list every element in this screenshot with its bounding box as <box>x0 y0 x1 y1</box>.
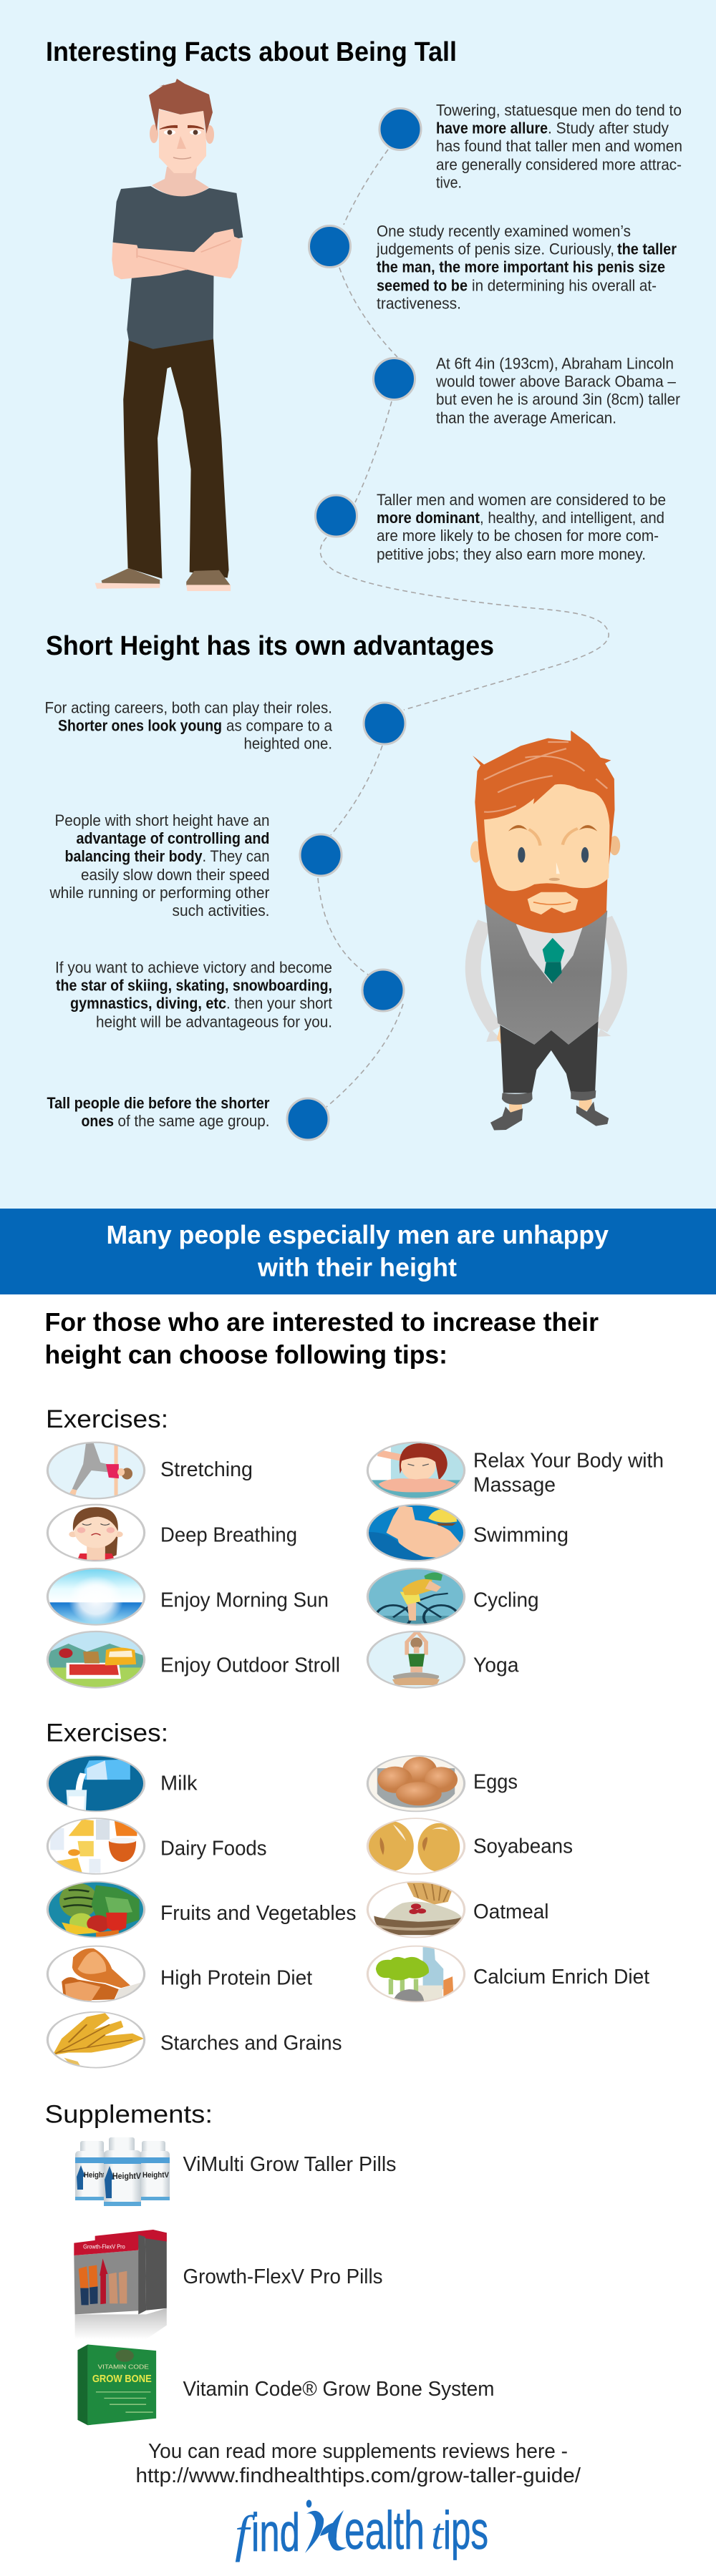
item: swimming <box>366 1504 569 1561</box>
icon: eggs <box>366 1755 466 1812</box>
label: High Protein Diet <box>160 1966 312 1989</box>
heading: tips <box>44 1307 599 1370</box>
illustration: short bearded man <box>470 731 620 1131</box>
fact 1: has found that taller men and women <box>436 137 682 155</box>
label: Massage <box>473 1474 556 1497</box>
icon: calcium enrich diet <box>366 1946 466 2003</box>
icon: dairy foods <box>46 1818 146 1875</box>
item: dairy foods <box>46 1818 267 1875</box>
fact 2: seemed to be <box>377 276 468 295</box>
item: soyabeans <box>366 1818 573 1875</box>
heading: exercises: Exercises: <box>46 1405 168 1433</box>
fact 2 <box>309 222 677 312</box>
heading: supplements: Supplements: <box>44 2101 213 2128</box>
item: starches and grains <box>46 2011 342 2069</box>
label: Milk <box>160 1772 198 1795</box>
heading: tips: For those who are interested to increase their <box>44 1307 599 1337</box>
advantage 2: balancing their body <box>64 847 203 865</box>
advantage 3 <box>55 959 404 1030</box>
advantage 4: Tall people die before the shorter <box>47 1094 270 1112</box>
advantage 3: If you want to achieve victory and become <box>55 959 332 976</box>
footer note: http://www.findhealthtips.com/grow-taller-guide/ <box>136 2464 581 2487</box>
fact 2: One study recently examined women’s <box>377 222 631 240</box>
advantage 3: height will be advantageous for you. <box>96 1013 332 1030</box>
fact 1: have more allure <box>436 119 548 137</box>
heading: tips: height can choose following tips: <box>44 1340 448 1370</box>
banner <box>0 1209 716 1294</box>
label: Stretching <box>160 1458 253 1481</box>
label: Starches and Grains <box>160 2032 342 2055</box>
label: Swimming <box>473 1524 569 1547</box>
icon: green box: GROW BONE <box>92 2372 152 2384</box>
icon: pill bottles: Height <box>84 2171 105 2180</box>
banner: with their height <box>257 1252 457 1282</box>
advantage 2: advantage of controlling and <box>76 829 269 847</box>
fact 1: tive. <box>436 173 462 192</box>
fact 1: . Study after study <box>548 119 669 137</box>
label: Eggs <box>473 1770 518 1793</box>
fact 2: the man, the more important his penis size <box>377 258 665 276</box>
label: ViMulti Grow Taller Pills <box>183 2153 397 2176</box>
heading: foods: Exercises: <box>46 1719 168 1747</box>
connector: dashed path through tall facts <box>318 150 609 1107</box>
logo: find health tips: f <box>235 2505 256 2562</box>
fact 2: in determining his overall at- <box>472 276 657 295</box>
label: Fruits and Vegetables <box>160 1902 357 1925</box>
label: Yoga <box>473 1654 519 1677</box>
label: Oatmeal <box>473 1901 548 1923</box>
fact 4: , healthy, and intelligent, and <box>480 509 664 527</box>
advantage 2 <box>49 811 342 919</box>
marker <box>315 495 357 537</box>
fact 4: more dominant <box>377 509 480 527</box>
advantage 1: as compare to a <box>226 717 332 734</box>
title: tall facts: Interesting Facts about Being Tall <box>46 37 457 67</box>
item: cycling <box>366 1568 538 1629</box>
label: Calcium Enrich Diet <box>473 1966 649 1989</box>
marker <box>300 834 342 876</box>
icon: oatmeal <box>366 1881 466 1938</box>
icon: pill bottles: HeightV <box>142 2171 170 2180</box>
advantage 4: ones <box>82 1112 114 1130</box>
logo: find health tips: ealth <box>344 2500 425 2560</box>
icon: morning sun <box>46 1568 146 1625</box>
advantage 2: easily slow down their speed <box>81 866 269 884</box>
logo: find health tips <box>235 2500 488 2562</box>
label: Cycling <box>473 1589 538 1611</box>
item: deep breathing <box>46 1504 297 1561</box>
label: Growth-FlexV Pro Pills <box>183 2265 382 2288</box>
label <box>473 1450 664 1497</box>
advantage 3: the star of skiing, skating, snowboarding, <box>56 976 332 995</box>
label: Enjoy Outdoor Stroll <box>160 1654 340 1677</box>
fact 3: but even he is around 3in (8cm) taller <box>436 391 680 408</box>
icon: fruits and vegetables <box>46 1881 146 1938</box>
icon: massage <box>366 1442 466 1499</box>
panel: light blue background <box>0 0 716 1209</box>
footer note: You can read more supplements reviews here - <box>148 2440 568 2463</box>
label: Dairy Foods <box>160 1838 266 1860</box>
label: Vitamin Code® Grow Bone System <box>183 2378 494 2401</box>
fact 2: judgements of penis size. Curiously, <box>376 240 614 258</box>
icon: cycling <box>366 1568 466 1629</box>
marker <box>309 226 351 268</box>
fact 4: are more likely to be chosen for more com- <box>377 527 659 545</box>
item: growth-flexv <box>74 2230 382 2339</box>
item: outdoor stroll <box>46 1631 340 1688</box>
icon: product boxes: Growth-FlexV Pro <box>83 2244 125 2250</box>
fact 3: than the average American. <box>436 409 616 426</box>
banner: Many people especially men are unhappy <box>106 1220 609 1249</box>
label: Relax Your Body with <box>473 1450 664 1473</box>
fact 4: petitive jobs; they also earn more money. <box>377 545 646 563</box>
marker <box>287 1098 329 1140</box>
advantage 3: . then your short <box>226 995 333 1012</box>
advantage 2: People with short height have an <box>54 811 269 829</box>
fact 1 <box>379 102 682 192</box>
item: stretching <box>46 1442 253 1499</box>
item: high protein diet <box>46 1946 312 2003</box>
heading: short height: Short Height has its own advantages <box>46 631 494 661</box>
label: Enjoy Morning Sun <box>160 1589 329 1611</box>
logo: find health tips: ind <box>251 2502 300 2562</box>
icon: outdoor stroll <box>46 1631 146 1688</box>
advantage 2: . They can <box>202 847 269 865</box>
item: vitamin code <box>77 2345 494 2425</box>
icon: deep breathing <box>46 1504 146 1561</box>
item: fruits and vegetables <box>46 1881 357 1938</box>
advantage 1: For acting careers, both can play their roles. <box>44 698 332 717</box>
icon: high protein diet <box>46 1946 146 2003</box>
item: vimulti <box>75 2137 397 2206</box>
marker <box>374 358 415 399</box>
icon: stretching <box>46 1442 146 1499</box>
item: massage <box>366 1442 664 1499</box>
icon: pill bottles <box>75 2137 170 2206</box>
marker <box>362 970 404 1011</box>
fact 3: would tower above Barack Obama – <box>435 372 676 391</box>
marker <box>364 703 405 744</box>
fact 3 <box>374 355 680 426</box>
advantage 2: while running or performing other <box>49 884 270 902</box>
item: eggs <box>366 1755 518 1812</box>
icon: green box <box>77 2345 156 2425</box>
item: calcium enrich diet <box>366 1946 649 2003</box>
icon: product boxes <box>74 2230 167 2339</box>
fact 4 <box>315 491 666 563</box>
advantage 3: gymnastics, diving, etc <box>70 995 226 1012</box>
icon: starches and grains <box>46 2011 146 2069</box>
logo: find health tips: t <box>431 2510 445 2559</box>
fact 1: Towering, statuesque men do tend to <box>436 102 682 119</box>
advantage 1: heighted one. <box>243 734 332 753</box>
item: milk <box>46 1755 198 1812</box>
item: oatmeal <box>366 1881 548 1938</box>
label: Soyabeans <box>473 1835 573 1858</box>
advantage 1 <box>44 698 405 753</box>
icon: yoga <box>366 1631 466 1688</box>
icon: milk <box>46 1755 146 1812</box>
footer note <box>136 2440 581 2487</box>
icon: pill bottles: HeightV <box>112 2171 141 2181</box>
logo: find health tips: ips <box>443 2500 488 2560</box>
marker <box>379 109 421 150</box>
fact 2: tractiveness. <box>377 295 461 312</box>
item: yoga <box>366 1631 519 1688</box>
fact 3: At 6ft 4in (193cm), Abraham Lincoln <box>436 355 674 372</box>
fact 4: Taller men and women are considered to be <box>377 491 666 509</box>
advantage 4 <box>47 1094 329 1140</box>
fact 1: are generally considered more attrac- <box>436 156 682 173</box>
illustration: tall man <box>95 79 243 591</box>
icon: green box: VITAMIN CODE <box>97 2363 149 2371</box>
fact 2: the taller <box>617 240 677 258</box>
icon: swimming <box>366 1504 466 1561</box>
label: Deep Breathing <box>160 1524 297 1547</box>
item: morning sun <box>46 1568 329 1625</box>
advantage 1: Shorter ones look young <box>58 717 222 734</box>
icon: soyabeans <box>366 1818 466 1875</box>
advantage 2: such activities. <box>172 902 269 919</box>
advantage 4: of the same age group. <box>117 1112 269 1130</box>
